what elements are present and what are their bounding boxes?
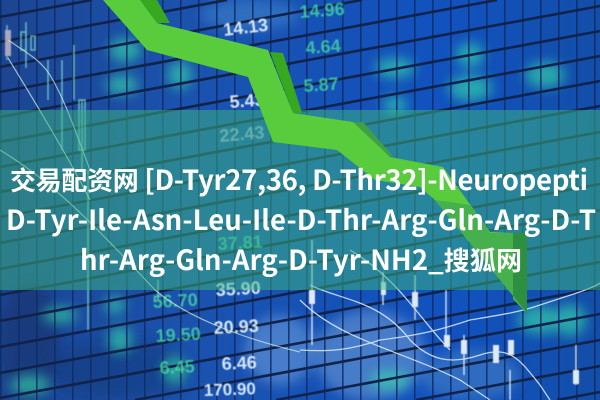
green down arrow — [103, 0, 527, 313]
candlestick chart: left — [5, 22, 158, 330]
price numbers: 6.46 — [221, 352, 257, 374]
arrow: lit faces — [103, 0, 527, 313]
price numbers: 20.93 — [213, 316, 259, 338]
price numbers: 37.81 — [217, 232, 263, 254]
price numbers: 5.87 — [303, 74, 339, 96]
trend lines: left to centre — [0, 40, 300, 352]
price numbers: 35.90 — [215, 278, 261, 300]
price numbers — [152, 0, 345, 400]
title text: hr-Arg-Gln-Arg-D-Tyr-NH2_搜狐网 — [80, 238, 522, 278]
translucent green band — [0, 110, 600, 290]
price numbers: 14.13 — [222, 15, 269, 40]
price numbers: 5.43 — [229, 90, 265, 112]
price numbers: 19.50 — [155, 324, 201, 346]
price numbers: 6.45 — [159, 356, 195, 378]
price numbers: 170.90 — [203, 379, 256, 400]
arrow: dark side faces — [140, 0, 302, 113]
arrow head shade — [435, 200, 527, 313]
price numbers: 56.70 — [152, 290, 198, 312]
title text — [6, 158, 596, 278]
trend lines: right — [300, 250, 600, 400]
price numbers: 4.64 — [305, 36, 341, 58]
candlestick chart: right — [309, 240, 579, 400]
title text: 交易配资网 [D-Tyr27,36, D-Thr32]-Neuropepti — [10, 158, 588, 198]
price numbers: 22.43 — [219, 122, 265, 146]
title text: D-Tyr-Ile-Asn-Leu-Ile-D-Thr-Arg-Gln-Arg-D-T — [6, 198, 596, 238]
